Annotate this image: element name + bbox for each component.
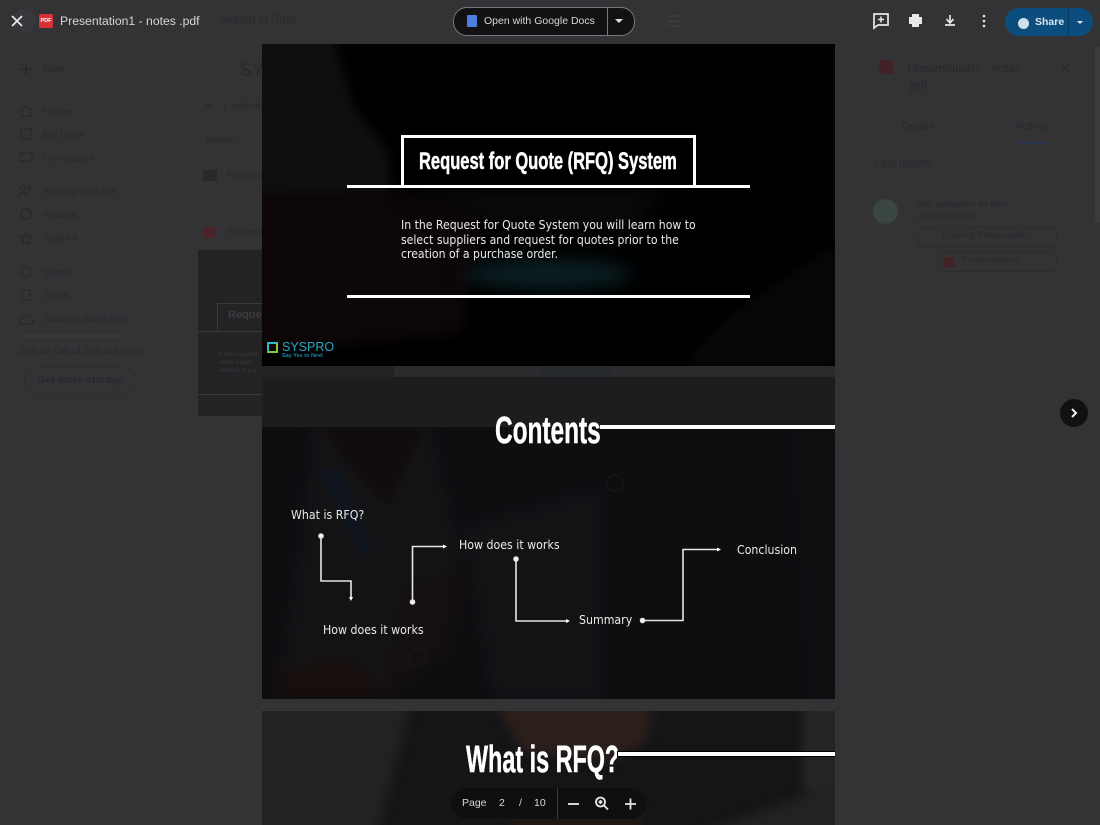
dimmed drive sidebar: 169.45 GB of 200 GB used bbox=[19, 345, 145, 357]
icon: close bbox=[11, 15, 23, 27]
dimmed details panel: Presentation1 - notes bbox=[907, 61, 1021, 75]
dimmed drive sidebar: Computers bbox=[43, 152, 94, 164]
slide 2 title rule bbox=[600, 425, 835, 429]
label: how does it works 1: How does it works bbox=[323, 623, 424, 637]
dimmed details panel: Activity bbox=[1015, 120, 1048, 132]
slide 1 description: In the Request for Quote System you will learn how to bbox=[401, 218, 696, 232]
dimmed file list: Present bbox=[227, 169, 263, 181]
icon: pdf: PDF bbox=[40, 18, 52, 24]
dimmed drive sidebar: Starred bbox=[43, 232, 77, 244]
connector 2 bbox=[410, 544, 447, 604]
dimmed file list: Name ↑ bbox=[205, 134, 241, 146]
label: what is rfq: What is RFQ? bbox=[291, 508, 364, 522]
dimmed drive sidebar: Home bbox=[43, 106, 71, 118]
dimmed drive sidebar: Get more storage bbox=[37, 374, 124, 386]
top bar bbox=[11, 7, 1093, 36]
slide 3 title: What is RFQ? bbox=[466, 739, 619, 781]
dimmed file list: creation of a p bbox=[218, 368, 256, 374]
dimmed drive sidebar: New bbox=[43, 63, 64, 75]
dimmed details panel: Details bbox=[902, 120, 934, 132]
slide 2 title: Contents bbox=[495, 410, 601, 452]
dimmed details panel: .pdf bbox=[907, 78, 927, 92]
contents flow diagram bbox=[318, 533, 721, 624]
dimmed drive sidebar bbox=[18, 63, 145, 386]
SYSPRO logo bbox=[267, 340, 334, 359]
slide 1 top rule bbox=[347, 185, 750, 188]
slide 3 title rule bbox=[618, 752, 835, 756]
SYSPRO logo: Say Yes to Next bbox=[282, 353, 323, 359]
slide 3 background photo bbox=[262, 711, 835, 825]
dimmed drive sidebar: My Drive bbox=[43, 129, 84, 141]
slide 1 description bbox=[401, 218, 696, 261]
slide 1 title: Request for Quote (RFQ) System bbox=[419, 148, 677, 175]
page controls: 10 bbox=[534, 797, 546, 809]
slide 1 bbox=[262, 44, 835, 366]
dimmed details panel bbox=[873, 60, 1071, 267]
label: summary: Summary bbox=[579, 613, 632, 627]
next page button bbox=[1060, 399, 1088, 427]
page controls: 2 bbox=[499, 797, 505, 809]
page controls bbox=[451, 788, 646, 819]
dimmed file list: ✕ bbox=[204, 100, 213, 112]
slide 1 bottom rule bbox=[347, 295, 750, 298]
dimmed file list: select suppli bbox=[218, 360, 251, 366]
strip of underlying page between slides bbox=[262, 366, 612, 377]
slide 1 description: creation of a purchase order. bbox=[401, 247, 558, 261]
connector 4 bbox=[640, 548, 721, 622]
dimmed details panel: You uploaded an item bbox=[917, 199, 1009, 210]
dimmed file list: Reques bbox=[228, 309, 268, 321]
dimmed details panel: 9:13 AM Feb 28 bbox=[917, 212, 973, 221]
label: how does it works 2: How does it works bbox=[459, 538, 560, 552]
dimmed drive sidebar: Trash bbox=[43, 290, 69, 302]
file name: Presentation1 - notes .pdf bbox=[60, 14, 200, 28]
toolbar icons bbox=[873, 13, 986, 30]
page controls: Page bbox=[462, 797, 487, 809]
dimmed file list: SY bbox=[240, 60, 264, 80]
slide 1 description: select suppliers and request for quotes prior to the bbox=[401, 232, 679, 246]
slide 2 bbox=[262, 377, 835, 699]
open with button: Open with Google Docs bbox=[484, 15, 595, 27]
dimmed drive sidebar: Recent bbox=[43, 209, 76, 221]
dimmed file list bbox=[196, 60, 270, 416]
connector 1 bbox=[319, 534, 353, 601]
slide 3 bbox=[262, 711, 835, 825]
open with button bbox=[453, 7, 635, 36]
dimmed file list: In the Request bbox=[218, 352, 257, 358]
connector 3 bbox=[514, 557, 570, 623]
dimmed drive sidebar: Spam bbox=[43, 267, 70, 279]
zoom icons bbox=[568, 796, 636, 810]
dimmed details panel: Last month bbox=[874, 158, 931, 170]
dimmed details panel: Training Presentatio... bbox=[941, 230, 1034, 241]
slide 2 background photo bbox=[262, 377, 835, 690]
icon: account avatar bbox=[13, 9, 36, 32]
icon: filter bbox=[667, 14, 680, 28]
slide 1 background photo bbox=[262, 44, 640, 350]
slide 1 title bbox=[401, 135, 696, 188]
search placeholder: Search in Drive bbox=[219, 14, 298, 26]
dimmed drive sidebar: Shared with me bbox=[43, 186, 116, 198]
share button: Share bbox=[1035, 16, 1064, 28]
SYSPRO logo: SYSPRO bbox=[282, 340, 334, 354]
label: conclusion: Conclusion bbox=[737, 543, 797, 557]
dimmed drive sidebar: Storage (84% full) bbox=[43, 313, 127, 325]
icon: pdf bbox=[39, 14, 53, 28]
scrollbar bbox=[1095, 47, 1100, 223]
dimmed file list: 1 selected bbox=[222, 100, 270, 112]
page controls: / bbox=[519, 797, 522, 809]
dimmed details panel: Presentation1 - ... bbox=[962, 255, 1037, 266]
dimmed file list: ··· bbox=[196, 62, 206, 74]
share button bbox=[1005, 8, 1093, 36]
dimmed file list: Present bbox=[227, 226, 263, 238]
dimmed details panel: ✕ bbox=[1059, 60, 1071, 76]
